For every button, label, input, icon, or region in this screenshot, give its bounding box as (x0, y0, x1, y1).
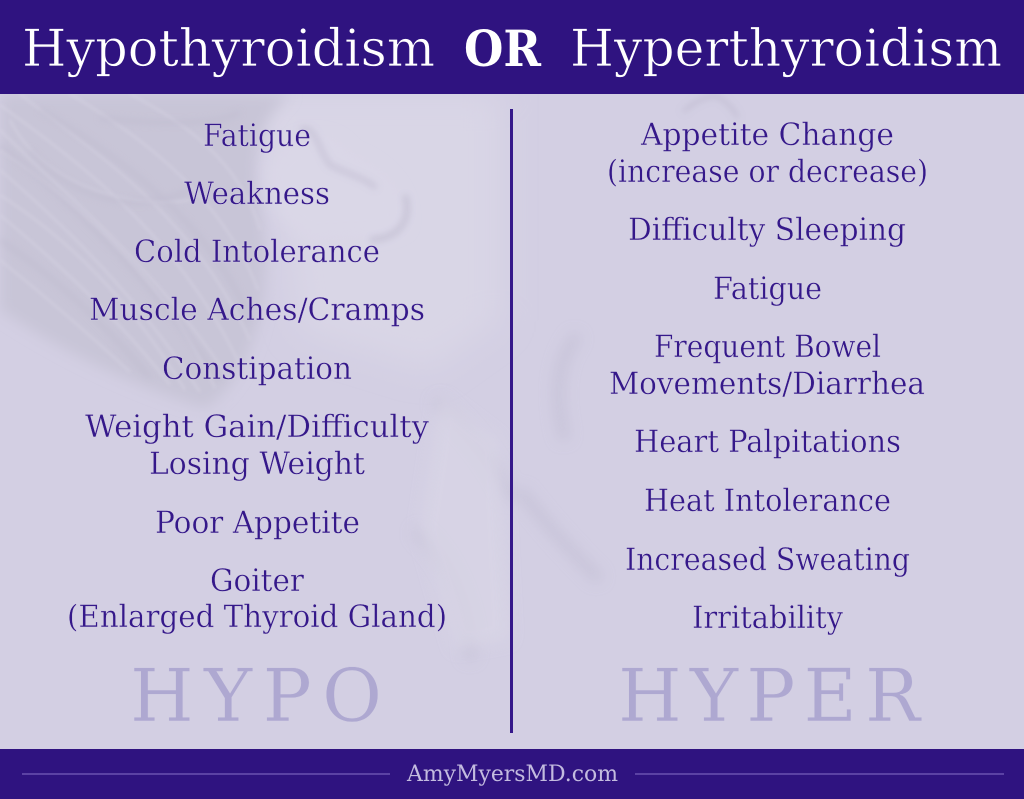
list: hyperthyroidism symptoms: Difficulty Sleeping (628, 212, 906, 248)
list: hyperthyroidism symptoms: Appetite Change (640, 117, 894, 153)
list: hyperthyroidism symptoms: Increased Sweating (625, 542, 910, 578)
list: hypothyroidism symptoms: Weight Gain/Difficulty (85, 409, 429, 445)
list: hyperthyroidism symptoms: Heart Palpitations (634, 424, 901, 460)
list: hypothyroidism symptoms: Muscle Aches/Cramps (89, 292, 425, 328)
list: hypothyroidism symptoms: Losing Weight (149, 446, 366, 482)
list: hypothyroidism symptoms: Poor Appetite (155, 505, 360, 541)
list: hyperthyroidism symptoms: Frequent Bowel (654, 329, 881, 365)
list: hypothyroidism symptoms: Constipation (162, 351, 352, 387)
fingers and neck shading (415, 335, 600, 660)
footer band (0, 749, 1024, 799)
list: hypothyroidism symptoms: (Enlarged Thyroid Gland) (67, 599, 447, 635)
list: hyperthyroidism symptoms: Heat Intolerance (644, 483, 891, 519)
label: HYPO: HYPO (130, 654, 382, 739)
label: HYPER: HYPER (618, 654, 922, 739)
list: hypothyroidism symptoms (67, 118, 447, 635)
list: hypothyroidism symptoms: Fatigue (203, 118, 311, 154)
title: OR: OR (464, 19, 541, 78)
divider between columns (510, 109, 513, 733)
icon: ear shape (303, 127, 410, 242)
list: hypothyroidism symptoms: Cold Intolerance (134, 234, 380, 270)
list: hyperthyroidism symptoms (607, 117, 928, 636)
footer text: website: AmyMyersMD.com (406, 762, 618, 787)
list: hypothyroidism symptoms: Goiter (210, 563, 304, 599)
list: hypothyroidism symptoms: Weakness (184, 176, 330, 212)
list: hyperthyroidism symptoms: (increase or decrease) (607, 154, 928, 190)
header band (0, 0, 1024, 94)
panel: background photo of neck and hair (0, 96, 399, 402)
list: hyperthyroidism symptoms: Movements/Diarrhea (609, 366, 925, 402)
title: Hypothyroidism: Hypothyroidism (22, 20, 435, 79)
list: hyperthyroidism symptoms: Fatigue (713, 271, 822, 307)
title: Hyperthyroidism: Hyperthyroidism (570, 20, 1002, 79)
list: hyperthyroidism symptoms: Irritability (692, 600, 843, 636)
